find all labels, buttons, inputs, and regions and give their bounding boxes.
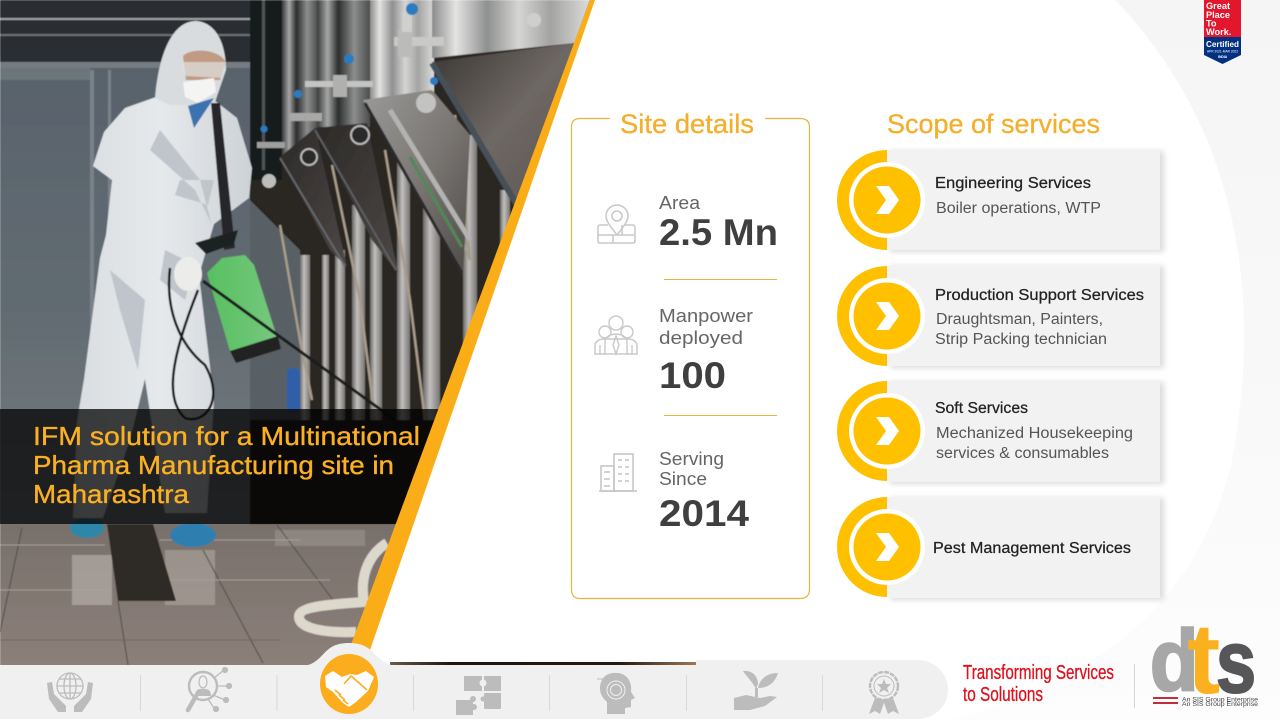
service card: production support: Production Support Services <box>935 287 1144 304</box>
panel: scope of services <box>837 109 1164 600</box>
worker glove <box>174 257 202 291</box>
serving since label: Serving <box>659 448 724 469</box>
service card: engineering: Engineering Services <box>935 175 1091 192</box>
tagline <box>963 662 1114 706</box>
photo floor reflections <box>72 530 365 605</box>
photo: worker spraying disinfectant in pharma plant <box>0 0 600 666</box>
icon: hand holding plant <box>734 671 778 710</box>
logo: dts: d <box>1150 612 1198 709</box>
worker strap <box>211 103 235 250</box>
photo wall and door <box>0 67 251 525</box>
logo: dts: t <box>1187 603 1220 715</box>
active tab bump <box>305 643 395 666</box>
icon: head with spiral <box>597 673 635 714</box>
title: IFM solution for a Multinational <box>33 421 420 451</box>
service card: soft services: Mechanized Housekeeping <box>936 425 1133 442</box>
worker suit <box>73 92 252 518</box>
badge: Great Place to Work certified: APR 2021-MAR 2022 <box>1207 50 1238 54</box>
tagline: to Solutions <box>963 684 1043 706</box>
photo floor drain <box>107 524 176 601</box>
site details heading: Site details <box>620 109 754 139</box>
manpower value: 100 <box>659 355 726 396</box>
area label: Area <box>659 192 701 213</box>
icon: team of people <box>595 316 637 354</box>
worker goggles <box>182 62 226 78</box>
title: Pharma Manufacturing site in <box>33 450 394 480</box>
badge: Great Place to Work certified: Certified <box>1206 39 1239 49</box>
title band <box>0 409 445 524</box>
bar background <box>0 660 948 719</box>
logo divider <box>1134 664 1135 708</box>
worker suit folds <box>110 130 214 370</box>
icon: puzzle pieces <box>456 676 501 715</box>
icon: buildings <box>599 454 637 491</box>
area value: 2.5 Mn <box>659 212 778 253</box>
service card: soft services: services & consumables <box>936 445 1109 462</box>
icon: active handshake <box>320 654 378 714</box>
badge: Great Place to Work certified: INDIA <box>1218 55 1228 59</box>
service card: pest management <box>837 497 1164 600</box>
photo stainless cones <box>280 43 575 275</box>
scope heading: Scope of services <box>887 109 1100 139</box>
photo machinery backdrop <box>250 0 600 530</box>
icon: map pin <box>598 205 635 243</box>
sprayer wand <box>202 280 383 412</box>
badge: Great Place to Work certified <box>1204 0 1241 64</box>
photo coiled hose <box>299 543 387 632</box>
icon: person in magnifier network <box>188 667 232 712</box>
manpower label <box>659 305 753 348</box>
service card: soft services: Soft Services <box>935 400 1028 417</box>
worker collar <box>188 98 214 128</box>
worker face <box>183 51 226 80</box>
worker right shoe <box>170 523 216 547</box>
serving since value: 2014 <box>659 493 749 534</box>
photo floor tile lines <box>0 525 333 665</box>
logo: dts <box>1150 603 1258 715</box>
worker left shoe <box>70 518 104 538</box>
sprayer handle <box>195 230 238 254</box>
title: Maharashtra <box>33 479 190 509</box>
dark strip above the bar <box>390 662 696 666</box>
service card: engineering <box>837 150 1164 252</box>
serving since label: Since <box>659 468 707 489</box>
title <box>33 421 420 509</box>
logo: dts: An SIS Group Enterprise <box>1182 696 1258 704</box>
sprayer tank <box>207 255 277 351</box>
worker mask <box>183 78 216 103</box>
photo ropes <box>280 115 470 420</box>
photo upper tanks <box>250 0 590 180</box>
icon: hands holding globe <box>47 673 93 712</box>
footer navigation bar <box>0 643 948 719</box>
photo valves <box>257 3 541 412</box>
manpower label: Manpower <box>659 305 753 326</box>
photo pipes <box>300 135 510 420</box>
white diagonal panel <box>345 0 1244 720</box>
badge: Great Place to Work certified: Place <box>1206 10 1230 20</box>
divider <box>664 279 777 280</box>
sprayer hose <box>169 268 213 419</box>
service card: production support: Draughtsman, Painters, <box>936 311 1103 328</box>
site details frame <box>572 118 810 598</box>
serving since label <box>659 448 724 489</box>
service card: soft services <box>837 381 1164 484</box>
photo dark upper band with pipes <box>0 0 251 328</box>
service card: production support: Strip Packing technician <box>935 331 1107 348</box>
badge: Great Place to Work certified: To <box>1206 18 1217 28</box>
background swoosh <box>950 0 1280 720</box>
photo floor <box>0 524 396 665</box>
logo: dts: An SIS Group Enterprise <box>1182 701 1258 708</box>
worker hood <box>155 21 226 105</box>
manpower label: deployed <box>659 327 743 348</box>
logo: dts: s <box>1216 613 1256 712</box>
service card: pest management: Pest Management Services <box>933 540 1131 557</box>
divider <box>664 415 777 416</box>
sprayer tank base <box>230 336 281 363</box>
yellow diagonal stripe <box>349 0 595 650</box>
badge: Great Place to Work certified: Work. <box>1206 27 1231 37</box>
photo lower left machinery <box>250 200 300 420</box>
service card: production support <box>837 265 1164 368</box>
icon: award rosette <box>869 672 899 714</box>
title band overlay <box>0 409 445 524</box>
separators <box>140 675 822 711</box>
service card: engineering: Boiler operations, WTP <box>936 200 1101 217</box>
worker figure <box>70 21 395 547</box>
panel: site details <box>572 109 810 598</box>
badge: Great Place to Work certified: Great <box>1206 1 1230 11</box>
tagline: Transforming Services <box>963 662 1114 684</box>
